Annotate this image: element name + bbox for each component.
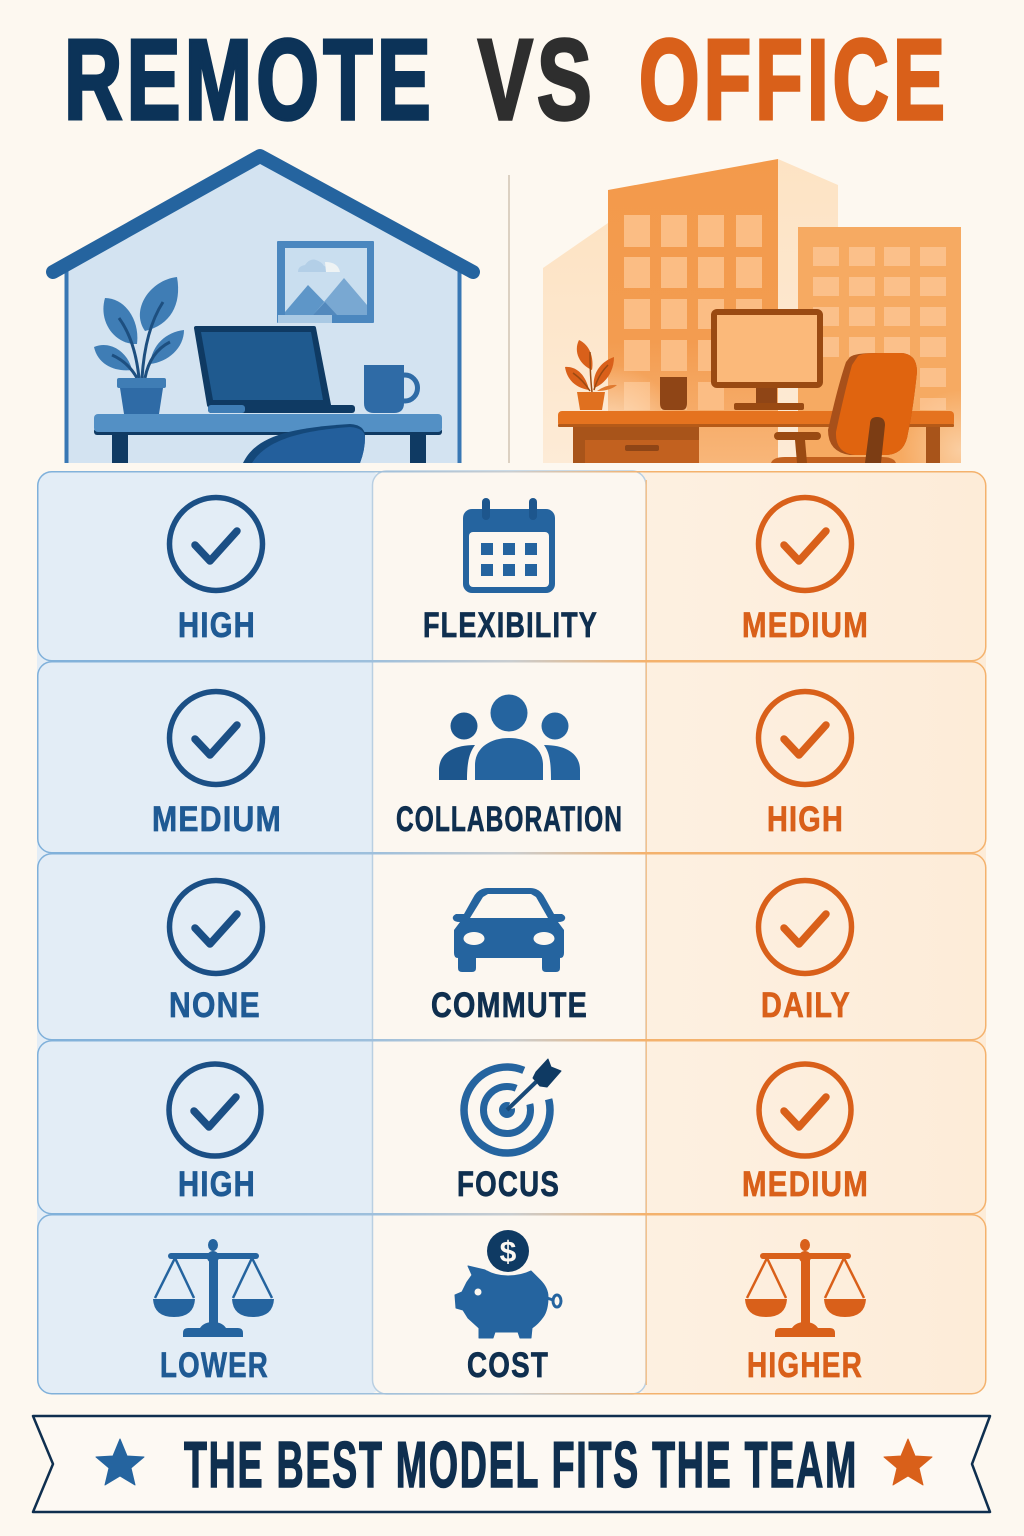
remote value: LOWER (160, 1346, 269, 1385)
windows: side building (813, 247, 946, 410)
criterion label: COMMUTE (431, 986, 588, 1025)
icon: wall picture (277, 241, 374, 323)
icon: orange star (884, 1439, 932, 1485)
windows: main building (624, 215, 762, 410)
remote check icon (170, 692, 262, 784)
office check icon (759, 1064, 851, 1156)
icon: piggy bank (455, 1230, 561, 1338)
row: commute (169, 880, 852, 1025)
title: REMOTE (64, 17, 435, 144)
office check icon (758, 498, 852, 590)
office value: MEDIUM (742, 606, 869, 645)
illustration: office building (543, 159, 961, 463)
icon: car (453, 888, 565, 972)
icon: plant (94, 277, 184, 414)
remote value: HIGH (178, 1165, 256, 1204)
remote value: HIGH (178, 606, 256, 645)
office check icon (758, 692, 852, 784)
row: cost (153, 1230, 866, 1385)
comparison table panel (37, 471, 986, 1394)
icon: target (464, 1058, 575, 1153)
criterion label: FLEXIBILITY (423, 606, 598, 645)
banner (33, 1416, 990, 1512)
chair (243, 424, 365, 463)
icon: piggy bank: $ (500, 1236, 517, 1269)
row: collaboration (152, 692, 852, 839)
icon: calendar (463, 498, 555, 593)
criterion label: COST (467, 1346, 549, 1385)
remote value: NONE (169, 986, 261, 1025)
icon: blue star (96, 1439, 144, 1485)
office check icon (758, 880, 852, 974)
icon: office scales (745, 1239, 866, 1337)
icon: laptop (196, 328, 355, 413)
divider (508, 175, 510, 463)
icon: remote scales (153, 1239, 274, 1337)
title: VS (478, 17, 596, 144)
icon: monitor (714, 312, 820, 410)
criterion label: COLLABORATION (396, 800, 623, 839)
desk (558, 411, 954, 463)
remote check icon (170, 498, 262, 590)
remote check icon (170, 880, 262, 974)
row: flexibility (170, 498, 869, 645)
title (64, 17, 949, 144)
office value: HIGH (767, 800, 844, 839)
remote value: MEDIUM (152, 800, 282, 839)
office value: DAILY (761, 986, 851, 1025)
office value: MEDIUM (742, 1165, 869, 1204)
desk (94, 414, 442, 463)
icon: mug (364, 365, 418, 413)
office value: HIGHER (747, 1346, 863, 1385)
remote check icon (169, 1064, 261, 1156)
criterion label: FOCUS (457, 1165, 560, 1204)
icon: cup (660, 377, 687, 410)
illustration: home office (53, 156, 473, 463)
icon: team (439, 694, 580, 780)
icon: small plant (565, 340, 617, 410)
office chair (771, 353, 917, 463)
row: focus (169, 1058, 869, 1204)
